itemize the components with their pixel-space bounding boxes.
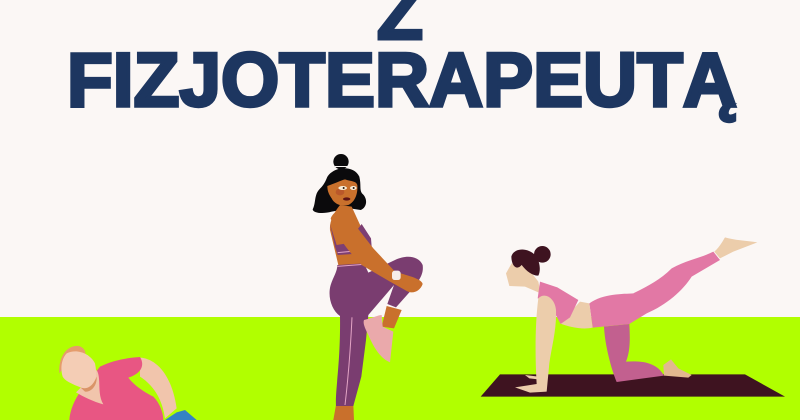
figure: woman in bird-dog pose on mat xyxy=(481,237,785,397)
figure: standing woman holding knee xyxy=(313,154,423,420)
back hand xyxy=(525,375,538,379)
raised leg xyxy=(589,252,720,328)
midriff xyxy=(560,302,593,328)
hair band xyxy=(335,165,348,168)
yoga mat xyxy=(481,374,785,397)
raised shoe xyxy=(364,315,393,362)
watch xyxy=(392,271,401,280)
leggings xyxy=(330,257,423,406)
neck xyxy=(76,370,103,404)
arm xyxy=(515,296,556,393)
cheek, eyes, lips xyxy=(336,186,357,201)
standing leg skin xyxy=(333,405,354,420)
title xyxy=(67,0,737,123)
head and neck xyxy=(506,263,541,293)
green floor xyxy=(0,317,800,420)
raised foot xyxy=(714,237,757,258)
jeans xyxy=(165,410,197,420)
title: FIZJOTERAPEUTĄ xyxy=(67,38,737,123)
beard line xyxy=(81,377,97,392)
raised shin skin xyxy=(382,306,402,328)
shirt xyxy=(69,357,163,420)
hair xyxy=(59,346,85,373)
crop top xyxy=(538,282,578,324)
supporting leg xyxy=(604,324,664,382)
face xyxy=(327,179,357,205)
torso skin xyxy=(330,205,372,265)
hair xyxy=(511,246,551,276)
face xyxy=(61,351,96,390)
figure: man bending sideways xyxy=(59,346,197,420)
arm xyxy=(140,358,177,418)
hair xyxy=(313,154,366,213)
arm xyxy=(331,211,423,292)
back foot xyxy=(663,359,692,378)
sports bra xyxy=(330,224,372,255)
